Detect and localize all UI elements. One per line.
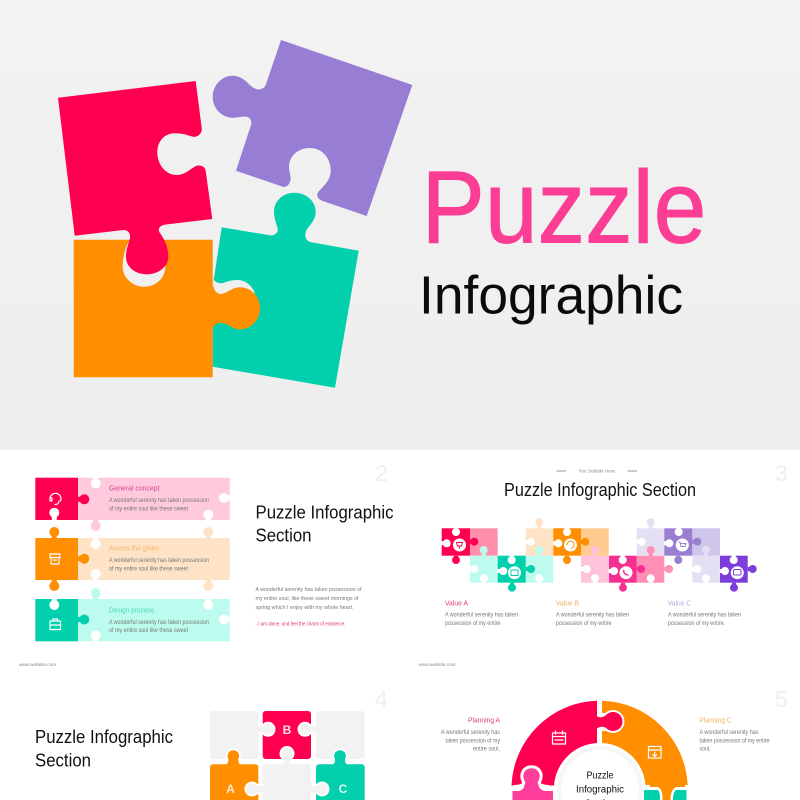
footer: slide 2 website: www.website.com [19,662,56,667]
text: Across the globe: Across the globe [109,544,159,553]
icon: green puzzle piece [212,193,359,388]
text: Planning C: Planning C [700,717,732,724]
icon: van badge [731,566,744,579]
pink tab [514,767,549,792]
icon: headset [50,493,61,504]
icon: cart badge [676,538,689,552]
icon: orange puzzle piece [74,240,260,377]
text: Value A: Value A [445,601,468,608]
text: Value C [668,601,741,627]
text: Planning C [700,717,770,752]
text: Value B: A wonderful serenity has taken [556,613,629,619]
slide number 5: 5 [775,686,788,712]
text: Planning A: entire soul, [473,746,500,752]
text: Across the globe: A wonderful serenity has taken possession [109,558,209,564]
text: Planning A [441,717,500,752]
icon: trophy badge [453,538,466,552]
text: Value C: Value C [668,601,691,608]
text: Design process [109,605,209,634]
centre text: Infographic [576,784,624,796]
heading: slide 4 [35,727,173,771]
icon: calendar download [648,746,661,758]
text: Design process: A wonderful serenity has taken possession [109,620,209,626]
text: Value C: A wonderful serenity has taken [668,613,741,619]
icon: briefcase [50,619,60,630]
text: Value A: possession of my entire [445,621,501,627]
row: Design process [35,588,230,642]
text: General concept [109,484,209,512]
text: Across the globe [109,544,209,572]
text block: slide 2 paragraph: my entire soul, like these sweet mornings of [256,596,359,602]
panel: slide 2 puzzle list [19,460,394,667]
title: Infographic: Infographic [419,266,683,326]
ring segment: pink [512,791,553,800]
icon: calendar [552,731,566,744]
text: Across the globe: of my entire soul like these sweet [109,566,188,572]
text: General concept: A wonderful serenity has taken possession [109,498,209,504]
text: Value B: possession of my entire [556,621,612,627]
text: Planning A: A wonderful serenity has [441,730,500,736]
gray pieces top row [210,711,365,759]
piece A: A [226,782,235,796]
row: Across the globe [35,527,230,591]
heading: slide 2: Section [256,526,312,546]
panel: slide 4 jigsaw grid [35,686,388,800]
ring segment: red [512,701,624,786]
white outline of red tab [596,710,624,733]
centre text [576,770,624,800]
piece B [256,711,317,761]
text: Value A [445,601,518,627]
slide number 2: 2 [375,460,388,486]
piece A [210,748,263,800]
text: Value B: Value B [556,601,579,608]
ring segment: orange [602,701,688,800]
panel: slide 3 puzzle timeline [418,460,788,667]
icon: archive box [50,554,60,564]
text: Planning A: Planning A [468,717,500,724]
centre text: Puzzle [586,770,614,782]
row: General concept [35,477,230,531]
panel: cover slide [0,0,800,450]
icon: purple puzzle piece [213,40,412,216]
text: Value A: A wonderful serenity has taken [445,613,518,619]
piece C: C [339,782,348,796]
text: Value B [556,601,629,627]
text: Planning C: taken possession of my entire [700,738,770,744]
heading: slide 2: Puzzle Infographic [256,502,394,522]
text: Value C: possession of my entire. [668,621,725,627]
icon: image badge [508,566,521,579]
heading: slide 4: Section [35,751,91,771]
heading: slide 4: Puzzle Infographic [35,727,173,747]
text: Design process: of my entire soul like these sweet [109,628,188,634]
subtitle [556,469,637,474]
text block: slide 2 paragraph: spring which I enjoy with my whole heart. [256,605,354,611]
heading: slide 3: Puzzle Infographic Section [504,480,696,500]
text: Planning C: soul, [700,746,711,752]
text: General concept: General concept [109,484,160,493]
puzzle group: purple and violet [636,518,757,592]
piece C [311,748,365,800]
heading: slide 2 [256,502,394,546]
icon: headset badge [564,538,577,552]
text block: slide 2 paragraph [256,587,362,628]
subtitle: You Subtitle Here [578,469,615,474]
piece B: B [283,723,292,737]
text block: slide 2 paragraph: - I am alone, and feel the charm of existence. [256,622,346,628]
centre circle [559,748,641,800]
icon: phone badge [620,566,632,579]
title: Puzzle: Puzzle [422,150,706,265]
icon: red puzzle piece [58,81,212,274]
text: Planning A: taken possession of my [446,738,500,744]
text block: slide 2 paragraph: A wonderful serenity has taken possession of [256,587,362,593]
panel: slide 5 circular puzzle [441,686,788,800]
footer: slide 3 website: www.website.com [418,662,456,667]
ring segment: green [644,790,686,800]
text: Planning C: A wonderful serenity has [700,730,758,736]
slide number 4: 4 [375,686,388,712]
slide number 3: 3 [775,460,788,486]
gray piece centre [263,748,311,800]
text: General concept: of my entire soul like these sweet [109,506,188,512]
puzzle group: red and green [441,528,553,592]
puzzle group: orange and pink [525,518,673,592]
text: Design process: Design process [109,605,154,614]
